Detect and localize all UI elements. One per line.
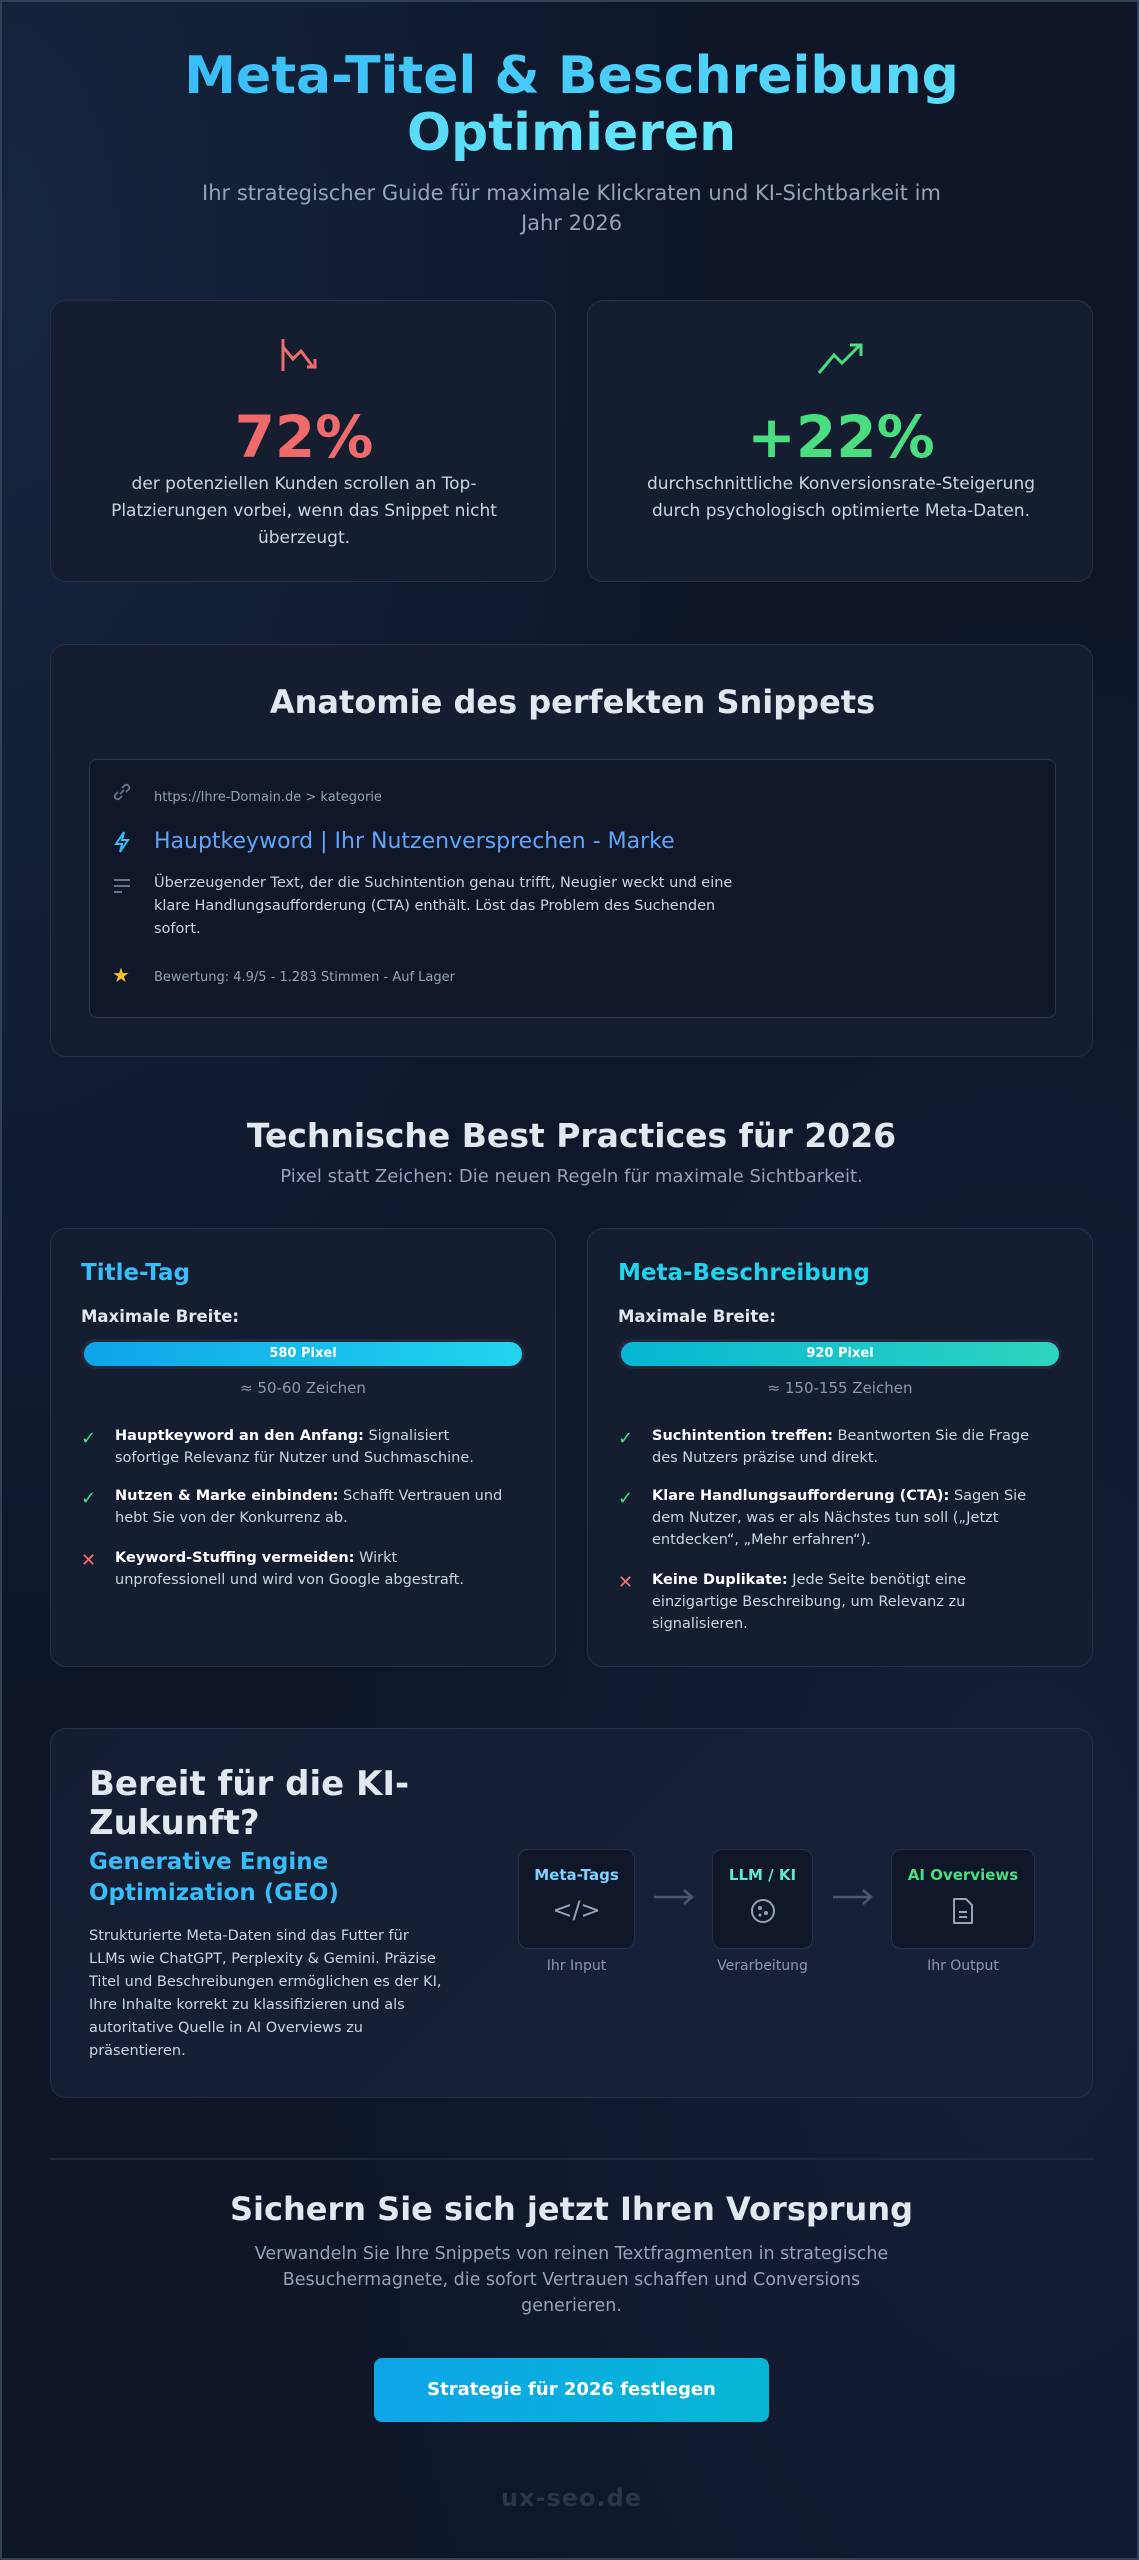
text: Verarbeitung <box>717 1958 808 1974</box>
body text: Strukturierte Meta-Daten sind das Futter für LLMs wie ChatGPT, Perplexity & Gemini. Präzise Titel und Beschreibungen ermöglichen es der KI, Ihre Inhalte korrekt zu klassifizieren und als autoritative Quelle in AI Overviews zu präsentieren. <box>89 1928 442 2059</box>
bar 920: 920 Pixel <box>806 1346 874 1361</box>
flow: meta-tags box <box>518 1849 635 1949</box>
label: Maximale Breite: <box>81 1307 239 1326</box>
rating: Bewertung: 4.9/5 - 1.283 Stimmen - Auf Lager <box>154 970 455 985</box>
panel: stat 72% <box>50 300 556 582</box>
title: Optimieren <box>407 103 736 163</box>
subtitle: Ihr strategischer Guide für maximale Klickraten und KI-Sichtbarkeit im Jahr 2026 <box>202 181 941 235</box>
stat number: +22% <box>747 403 935 471</box>
arrow 1 <box>654 1889 694 1905</box>
icon: link <box>114 784 130 800</box>
panel: meta description: ✓ <box>618 1488 633 1509</box>
icon: lines <box>114 879 130 893</box>
panel: title-tag <box>50 1228 556 1667</box>
heading: Anatomie des perfekten Snippets <box>270 683 875 721</box>
icon: trend down <box>282 339 316 371</box>
panel: anatomy <box>50 644 1093 1057</box>
panel: title-tag: ✕ <box>81 1550 96 1571</box>
text: Ihr Output <box>927 1958 999 1974</box>
url: https://Ihre-Domain.de > kategorie <box>154 790 382 805</box>
flow: llm box <box>712 1849 813 1949</box>
stat text: durchschnittliche Konversionsrate-Steigerung durch psychologisch optimierte Meta-Daten. <box>647 474 1035 521</box>
heading: Bereit für die KI-Zukunft? <box>89 1764 409 1843</box>
bar 580 <box>81 1339 525 1369</box>
subheading: Pixel statt Zeichen: Die neuen Regeln für maximale Sichtbarkeit. <box>280 1166 863 1187</box>
flow: llm box: LLM / KI <box>729 1866 796 1884</box>
panel: meta description <box>587 1228 1093 1667</box>
flow: meta-tags box: Meta-Tags <box>534 1866 619 1884</box>
item 1: Hauptkeyword an den Anfang: Signalisiert sofortige Relevanz für Nutzer und Suchmaschine. <box>115 1428 474 1466</box>
stat text: der potenziellen Kunden scrollen an Top-Platzierungen vorbei, wenn das Snippet nicht überzeugt. <box>111 474 497 548</box>
item 1: Suchintention treffen: Beantworten Sie die Frage des Nutzers präzise und direkt. <box>652 1428 1029 1466</box>
description: Überzeugender Text, der die Suchintention genau trifft, Neugier weckt und eine klare Handlungsaufforderung (CTA) enthält. Löst das Problem des Suchenden sofort. <box>154 875 732 937</box>
bar 920 <box>618 1339 1062 1369</box>
icon: star: ★ <box>112 963 130 987</box>
panel: title-tag: ✓ <box>81 1488 96 1509</box>
CTA heading: Sichern Sie sich jetzt Ihren Vorsprung <box>230 2190 913 2228</box>
arrow 2 <box>833 1889 873 1905</box>
heading: best practices: Technische Best Practices für 2026 <box>247 1116 896 1155</box>
snippet mockup <box>89 759 1056 1018</box>
flow: AI overviews box: AI Overviews <box>908 1866 1018 1884</box>
subheading: Generative Engine Optimization (GEO) <box>89 1849 339 1906</box>
panel: stat +22% <box>587 300 1093 582</box>
chars: ≈ 50-60 Zeichen <box>240 1379 366 1397</box>
CTA text: Verwandeln Sie Ihre Snippets von reinen Textfragmenten in strategische Besuchermagnete, die sofort Vertrauen schaffen und Conversions generieren. <box>255 2244 888 2316</box>
item 2: Klare Handlungsaufforderung (CTA): Sagen Sie dem Nutzer, was er als Nächstes tun soll („Jetzt entdecken“, „Mehr erfahren“). <box>652 1488 1026 1548</box>
snippet title: Hauptkeyword | Ihr Nutzenversprechen - Marke <box>154 829 675 854</box>
flow: AI overviews box <box>891 1849 1035 1949</box>
item 2: Nutzen & Marke einbinden: Schafft Vertrauen und hebt Sie von der Konkurrenz ab. <box>115 1488 502 1526</box>
flow labels: Ihr Input <box>547 1958 606 1974</box>
panel: meta description: ✓ <box>618 1428 633 1449</box>
CTA button: Strategie für 2026 festlegen <box>427 2379 716 2400</box>
CTA button <box>374 2358 769 2422</box>
card heading: Meta-Beschreibung <box>618 1260 870 1286</box>
panel: title-tag: ✓ <box>81 1428 96 1449</box>
title: Meta-Titel & Beschreibung <box>184 46 959 106</box>
bar 580: 580 Pixel <box>269 1346 337 1361</box>
panel: meta description: ✕ <box>618 1572 633 1593</box>
label: Maximale Breite: <box>618 1307 776 1326</box>
icon: bolt <box>114 832 130 852</box>
icon: trend up <box>818 344 862 374</box>
panel: GEO <box>50 1728 1093 2098</box>
item 3: Keyword-Stuffing vermeiden: Wirkt unprofessionell und wird von Google abgestraft. <box>115 1550 464 1588</box>
stat number: 72% <box>235 403 373 471</box>
flow: meta-tags box: </> <box>552 1896 601 1924</box>
card heading: Title-Tag <box>81 1260 190 1286</box>
title <box>184 46 959 163</box>
footer: ux-seo.de <box>501 2484 642 2512</box>
item 3: Keine Duplikate: Jede Seite benötigt eine einzigartige Beschreibung, um Relevanz zu signalisieren. <box>652 1572 966 1632</box>
chars: ≈ 150-155 Zeichen <box>768 1379 912 1397</box>
